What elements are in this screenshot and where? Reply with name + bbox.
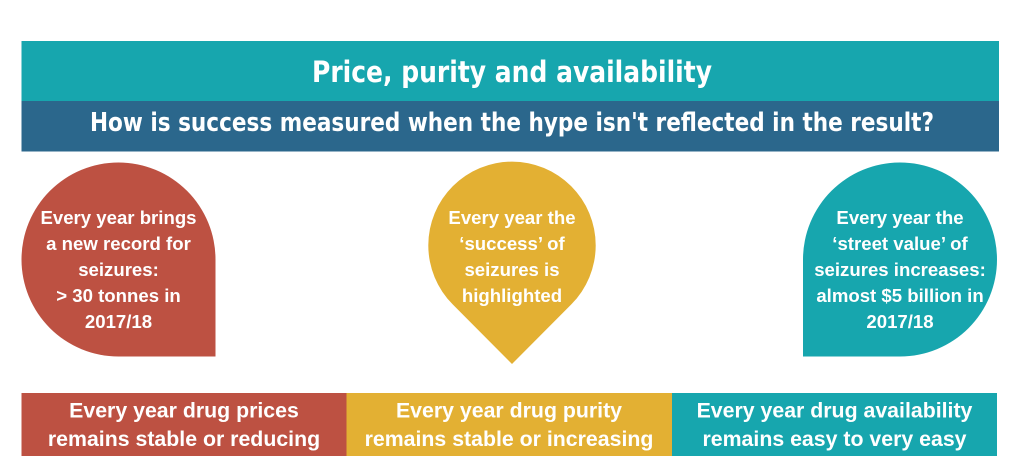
panel: drug prices: remains stable or reducing xyxy=(48,427,320,451)
callout: street value: seizures increases: xyxy=(814,259,986,280)
callout: record seizures: a new record for xyxy=(46,233,191,254)
callout: street value: almost $5 billion in xyxy=(816,285,984,306)
callout: success highlighted: Every year the xyxy=(448,207,576,228)
callout: record seizures: > 30 tonnes in xyxy=(56,285,181,306)
callout: street value: 2017/18 xyxy=(866,311,934,332)
subtitle banner xyxy=(22,101,999,152)
callout: record seizures: Every year brings xyxy=(40,207,197,228)
callout: record seizures xyxy=(21,162,215,356)
callout: street value: ‘street value’ of xyxy=(832,233,968,254)
callout: record seizures: seizures: xyxy=(78,259,159,280)
panel: drug availability: Every year drug availability xyxy=(697,398,973,422)
callout: street value xyxy=(803,162,997,356)
panel: drug availability: remains easy to very easy xyxy=(702,427,967,451)
callout: success highlighted: ‘success’ of xyxy=(459,233,566,254)
callout: success highlighted: seizures is xyxy=(464,259,560,280)
callout: success highlighted xyxy=(428,162,596,364)
panel: drug availability xyxy=(672,393,997,456)
panel: drug prices: Every year drug prices xyxy=(69,398,299,422)
callout: success highlighted: highlighted xyxy=(462,285,562,306)
title banner: Price, purity and availability xyxy=(312,55,712,89)
panel: drug prices xyxy=(22,393,346,456)
callout: record seizures: 2017/18 xyxy=(85,311,152,332)
panel: drug purity: Every year drug purity xyxy=(396,398,622,422)
callout: street value: Every year the xyxy=(836,207,964,228)
panel: drug purity: remains stable or increasing xyxy=(365,427,653,451)
title banner xyxy=(22,41,999,101)
panel: drug purity xyxy=(346,393,672,456)
